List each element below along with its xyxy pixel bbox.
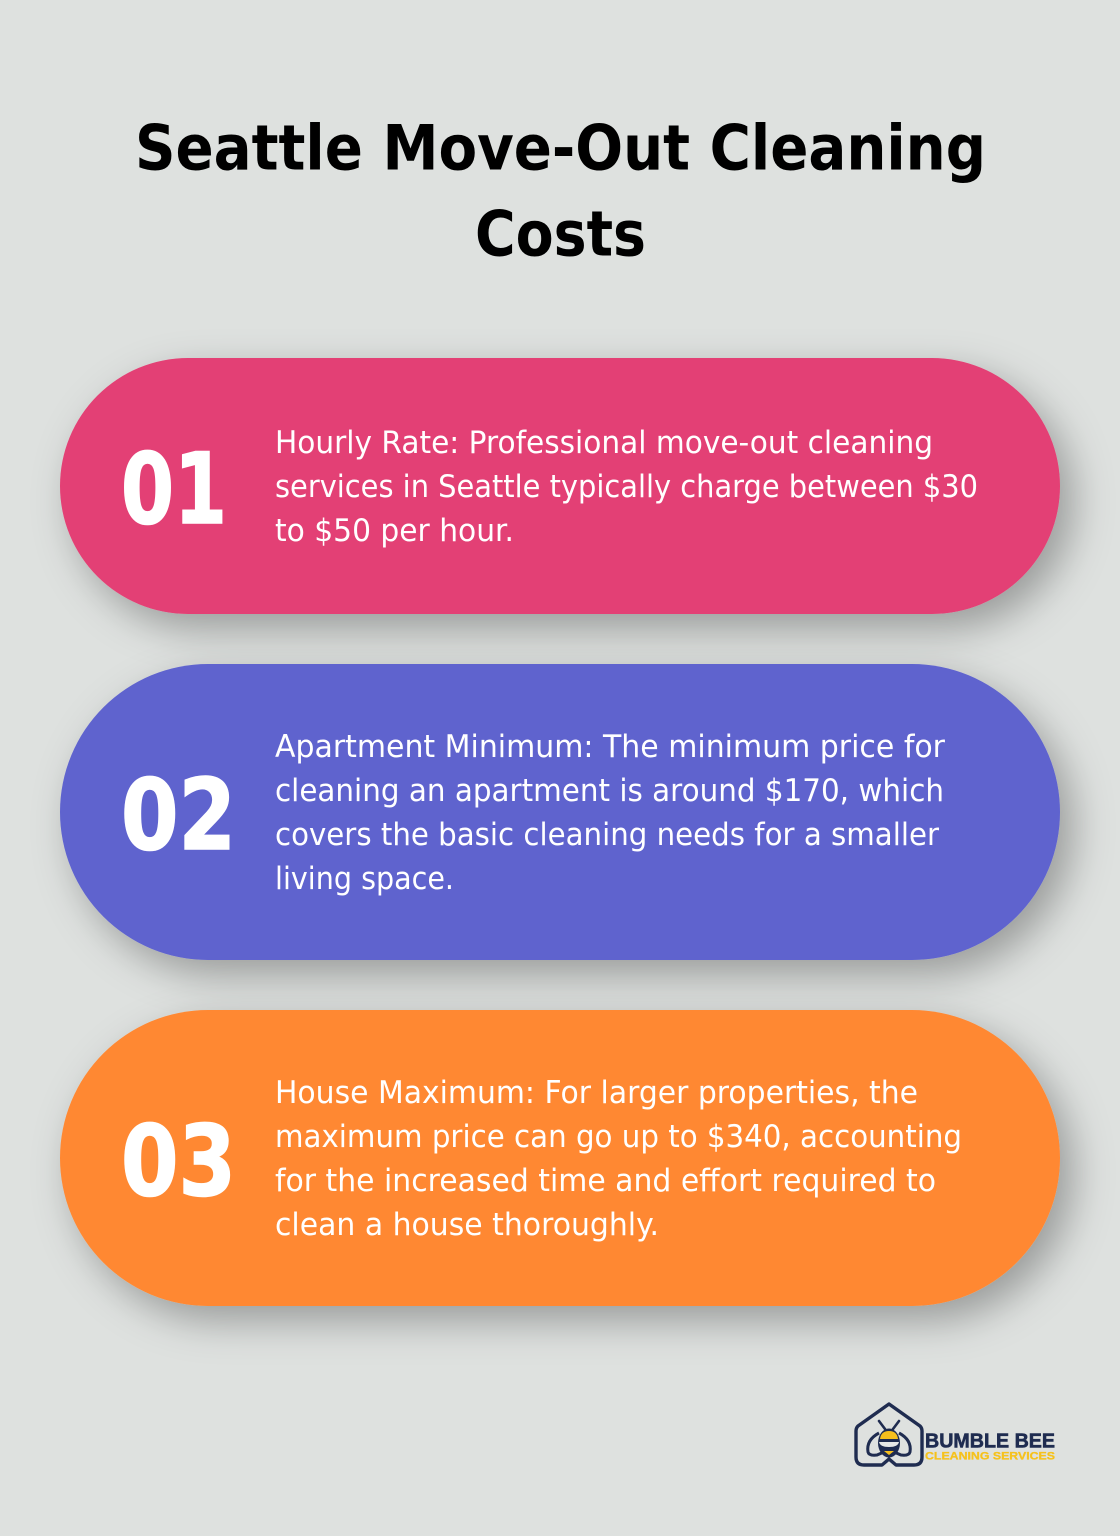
text block: apartment minimum: Apartment Minimum: The minimum price for [275, 729, 945, 765]
number 03: 03 [121, 1105, 236, 1219]
text block: hourly rate [275, 425, 978, 549]
pill background pink [60, 358, 1060, 614]
logo tagline: CLEANING SERVICES [925, 1450, 1055, 1462]
text block: hourly rate: Hourly Rate: Professional move-out cleaning [275, 425, 933, 461]
panel: apartment minimum [60, 664, 1060, 960]
pill background blue [60, 664, 1060, 960]
number 01: 01 [121, 433, 227, 547]
text block: apartment minimum [275, 729, 945, 897]
text block: house maximum: for the increased time and effort required to [275, 1163, 936, 1199]
text block: apartment minimum: living space. [275, 861, 454, 897]
title: Seattle Move-Out Cleaning [135, 112, 986, 184]
number 02: 02 [121, 759, 236, 873]
text block: apartment minimum: covers the basic cleaning needs for a smaller [275, 817, 939, 853]
title: Costs [475, 198, 646, 270]
logo wordmark: BUMBLE BEE [925, 1430, 1055, 1452]
panel: house maximum [60, 1010, 1060, 1306]
text block: apartment minimum: cleaning an apartment is around $170, which [275, 773, 944, 809]
logo: Bumble Bee Cleaning Services [856, 1404, 1055, 1465]
text block: house maximum: maximum price can go up to $340, accounting [275, 1119, 962, 1155]
text block: house maximum: clean a house thoroughly. [275, 1207, 659, 1243]
panel: hourly rate [60, 358, 1060, 614]
text block: hourly rate: services in Seattle typically charge between $30 [275, 469, 978, 505]
text block: house maximum: House Maximum: For larger properties, the [275, 1075, 918, 1111]
pill background orange [60, 1010, 1060, 1306]
text block: hourly rate: to $50 per hour. [275, 513, 514, 549]
icon: house with bee [856, 1404, 922, 1465]
text block: house maximum [275, 1075, 962, 1243]
title [135, 112, 986, 270]
